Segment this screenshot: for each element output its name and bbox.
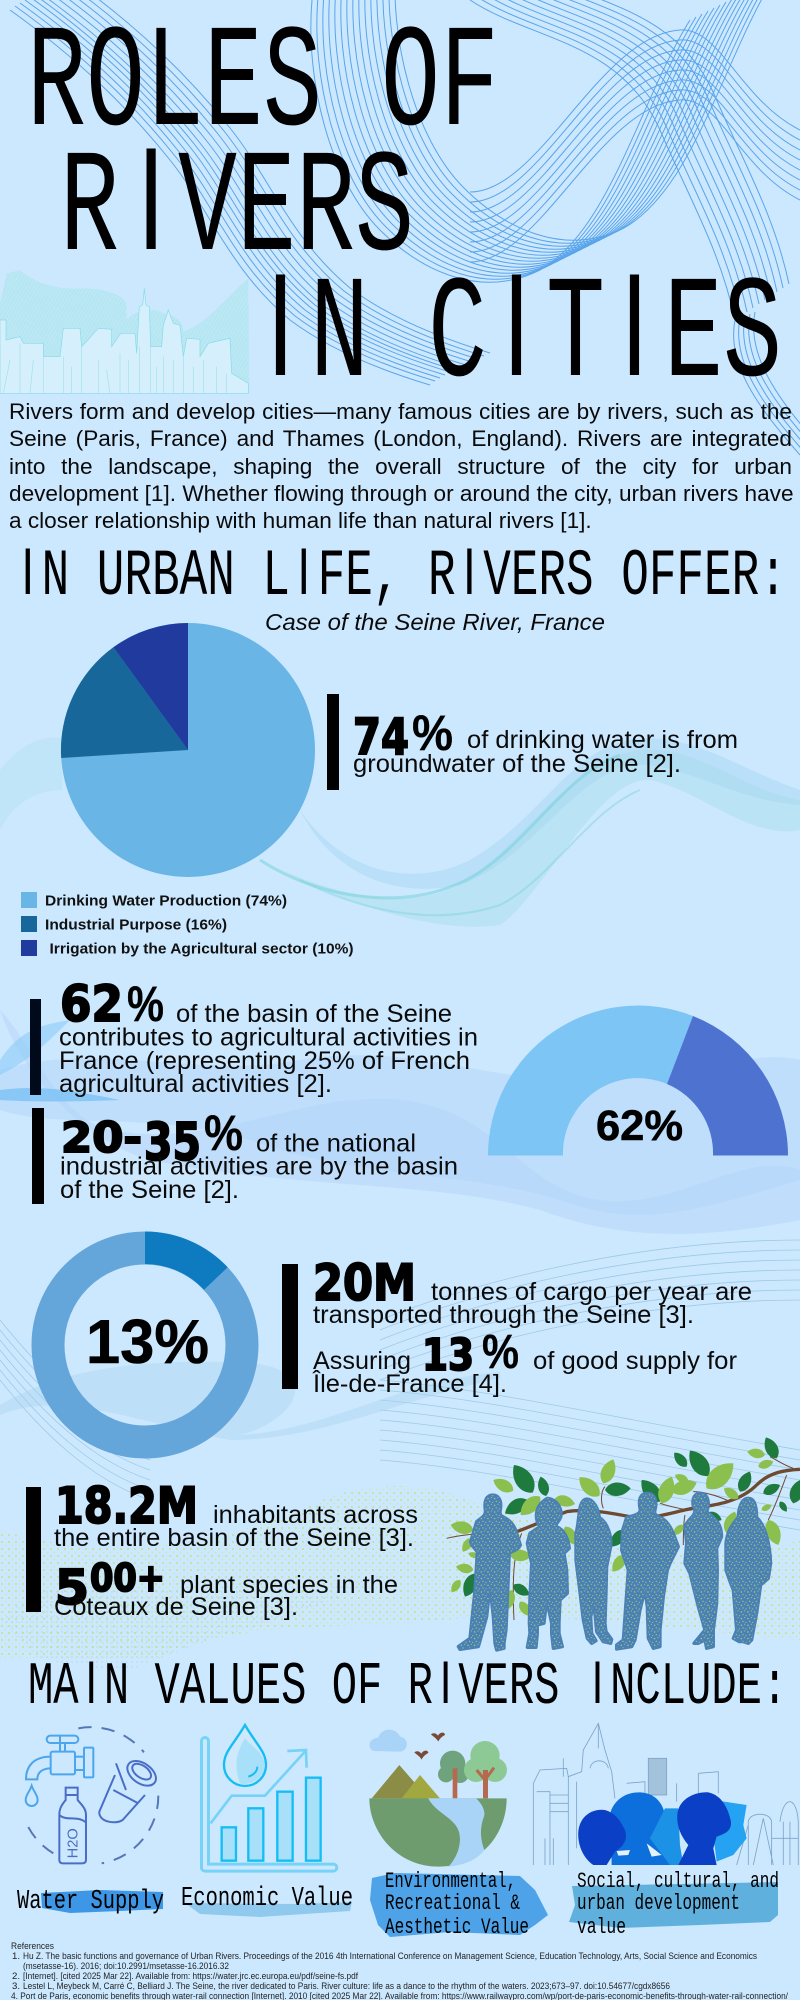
stat: inhabitants and plant species: the entire basin of the Seine [3]. bbox=[54, 1524, 414, 1552]
heading: main values: NCLUDE: bbox=[610, 1653, 787, 1722]
stat: 62%: France (representing 25% of French bbox=[59, 1047, 470, 1075]
stat: cargo and goods supply: Île-de-France [4]. bbox=[312, 1369, 507, 1398]
heading: in urban life: I bbox=[21, 536, 34, 609]
heading: in urban life: I bbox=[297, 536, 310, 609]
stat: cargo and goods supply: % bbox=[482, 1326, 519, 1379]
stat: 62%: agricultural activities [2]. bbox=[59, 1070, 332, 1098]
title: I bbox=[503, 244, 530, 407]
pie chart bbox=[61, 623, 315, 877]
stat: 20-35%: of the Seine [2]. bbox=[60, 1176, 239, 1204]
label: environmental, recreational and aesthetic value bbox=[370, 1869, 548, 1940]
heading: main values: MA bbox=[28, 1653, 79, 1722]
references: (msetasse-16). 2016; doi:10.2991/msetasse-16.2016.32 bbox=[23, 1961, 229, 1972]
heading: in urban life: FE, R bbox=[318, 541, 456, 615]
title: ROLES OF bbox=[27, 3, 499, 169]
label: environmental, recreational and aesthetic value: Environmental, bbox=[385, 1869, 516, 1894]
stat: 20-35%: of the national bbox=[256, 1130, 416, 1158]
legend: Irrigation by the Agricultural sector (10%) bbox=[50, 942, 354, 958]
heading: in urban life: N URBAN L bbox=[42, 541, 290, 615]
references: 1. bbox=[12, 1951, 20, 1962]
background: teal ribbon wave bbox=[0, 737, 800, 927]
label: social, cultural and urban development value: value bbox=[577, 1915, 626, 1940]
label: economic value: Economic Value bbox=[181, 1884, 353, 1914]
donut chart: 13% bbox=[48, 1232, 242, 1442]
stat: cargo and goods supply bbox=[282, 1254, 752, 1398]
stat: 20-35%: 20- bbox=[61, 1113, 142, 1162]
stat: 62%: contributes to agricultural activities in bbox=[59, 1024, 478, 1052]
title: I bbox=[137, 118, 165, 281]
stat: 62%: 62 bbox=[60, 975, 123, 1033]
title: I bbox=[267, 244, 294, 407]
stat: 74%: groundwater of the Seine [2]. bbox=[353, 750, 681, 778]
stat: 62% bbox=[30, 975, 478, 1098]
heading: main values: I bbox=[85, 1649, 97, 1716]
stat: inhabitants and plant species: Côteaux de Seine [3]. bbox=[54, 1593, 298, 1621]
title: T bbox=[546, 254, 605, 420]
stat: 74% bbox=[327, 694, 738, 790]
stat: inhabitants and plant species bbox=[26, 1477, 418, 1621]
intro paragraph: Rivers form and develop cities—many famous cities are by rivers, such as the bbox=[9, 399, 792, 424]
legend: Drinking Water Production (74%) bbox=[45, 894, 287, 910]
stat: inhabitants and plant species: inhabitants across bbox=[213, 1501, 418, 1529]
stat: cargo and goods supply: transported through the Seine [3]. bbox=[313, 1301, 694, 1329]
intro paragraph: Seine (Paris, France) and Thames (London, England). Rivers are integrated bbox=[9, 426, 792, 451]
background: blue translucent wave bbox=[0, 1010, 800, 1234]
legend: Industrial Purpose (16%) bbox=[45, 918, 227, 934]
label: water supply: Water Supply bbox=[17, 1887, 164, 1917]
stat: 74%: % bbox=[412, 705, 453, 761]
background: contour river lines behind title bbox=[10, 0, 800, 455]
stat: inhabitants and plant species: 00+ bbox=[90, 1556, 165, 1600]
stat: 74%: of drinking water is from bbox=[467, 726, 738, 754]
stat: inhabitants and plant species: 18.2M bbox=[55, 1477, 198, 1535]
icon: water supply bbox=[25, 1727, 160, 1863]
stat: 62%: % bbox=[127, 976, 164, 1032]
label: environmental, recreational and aesthetic value: Aesthetic Value bbox=[385, 1915, 529, 1940]
references bbox=[11, 1941, 788, 2000]
illustration: teal skyline bbox=[0, 270, 249, 393]
title: ES bbox=[664, 254, 782, 420]
stat: cargo and goods supply: 13 bbox=[422, 1330, 474, 1381]
stat: 74%: 74 bbox=[353, 708, 409, 766]
stat: cargo and goods supply: 20M bbox=[313, 1254, 416, 1312]
stat: cargo and goods supply: of good supply for bbox=[533, 1347, 737, 1375]
stat: inhabitants and plant species: 5 bbox=[55, 1560, 89, 1616]
heading: main values: N VALUES OF R bbox=[104, 1653, 433, 1722]
legend bbox=[21, 892, 354, 958]
references: Lestel L, Meybeck M, Carré C, Belliard J. The Seine, the river dedicated to Paris. River culture: life as a dance to the rhythm of the waters. 2023;673–97. doi:10.54677/cgdx8656 bbox=[23, 1981, 670, 1992]
stat: cargo and goods supply: Assuring bbox=[313, 1347, 411, 1375]
references: 2. bbox=[12, 1971, 20, 1982]
intro paragraph: development [1]. Whether flowing through or around the city, urban rivers have bbox=[9, 481, 794, 506]
title bbox=[27, 3, 782, 420]
title: I bbox=[621, 244, 648, 407]
stat: 20-35%: industrial activities are by the basin bbox=[60, 1152, 458, 1180]
subtitle: Case of the Seine River, France bbox=[265, 609, 605, 635]
label: environmental, recreational and aesthetic value: Recreational & bbox=[385, 1891, 520, 1916]
heading: main values: I bbox=[592, 1649, 603, 1716]
heading: in urban life: I bbox=[463, 536, 476, 609]
stat: 20-35% bbox=[32, 1105, 458, 1204]
donut chart: 13%: 13% bbox=[86, 1308, 209, 1377]
stat: inhabitants and plant species: plant species in the bbox=[180, 1571, 398, 1599]
title: R bbox=[60, 128, 119, 294]
intro paragraph: into the landscape, shaping the overall structure of the city for urban bbox=[9, 454, 792, 479]
intro paragraph: a closer relationship with human life than natural rivers [1]. bbox=[9, 508, 592, 533]
references: 3. bbox=[12, 1981, 20, 1992]
intro paragraph bbox=[9, 399, 794, 533]
title: N C bbox=[310, 254, 487, 420]
label: social, cultural and urban development value bbox=[569, 1869, 779, 1940]
icon: environmental landscape bbox=[369, 1730, 507, 1867]
stat: 20-35%: 35 bbox=[144, 1113, 201, 1173]
heading: main values: I bbox=[440, 1649, 451, 1716]
icon: social silhouettes over city bbox=[533, 1723, 798, 1865]
icon: water supply: H2O bbox=[65, 1828, 81, 1858]
background: green dotted wave bbox=[0, 1486, 800, 1672]
gauge chart: 62% bbox=[488, 1006, 788, 1156]
illustration: people under a branch bbox=[447, 1435, 800, 1650]
background: fine lines wave bbox=[0, 1240, 800, 1530]
label: social, cultural and urban development value: urban development bbox=[577, 1891, 740, 1916]
title: VERS bbox=[178, 128, 414, 294]
heading: main values: VERS bbox=[458, 1653, 559, 1722]
references: References bbox=[11, 1941, 54, 1952]
icon: economic value chart bbox=[205, 1725, 333, 1868]
stat: cargo and goods supply: tonnes of cargo per year are bbox=[431, 1278, 752, 1306]
heading: in urban life: VERS OFFER: bbox=[483, 541, 787, 615]
stat: 62%: of the basin of the Seine bbox=[176, 1000, 452, 1028]
gauge chart: 62%: 62% bbox=[596, 1102, 683, 1150]
references: [Internet]. [cited 2025 Mar 22]. Available from: https://water.jrc.ec.europa.eu/pdf/seine-fs.pdf bbox=[23, 1971, 358, 1982]
stat: 20-35%: % bbox=[204, 1105, 243, 1161]
